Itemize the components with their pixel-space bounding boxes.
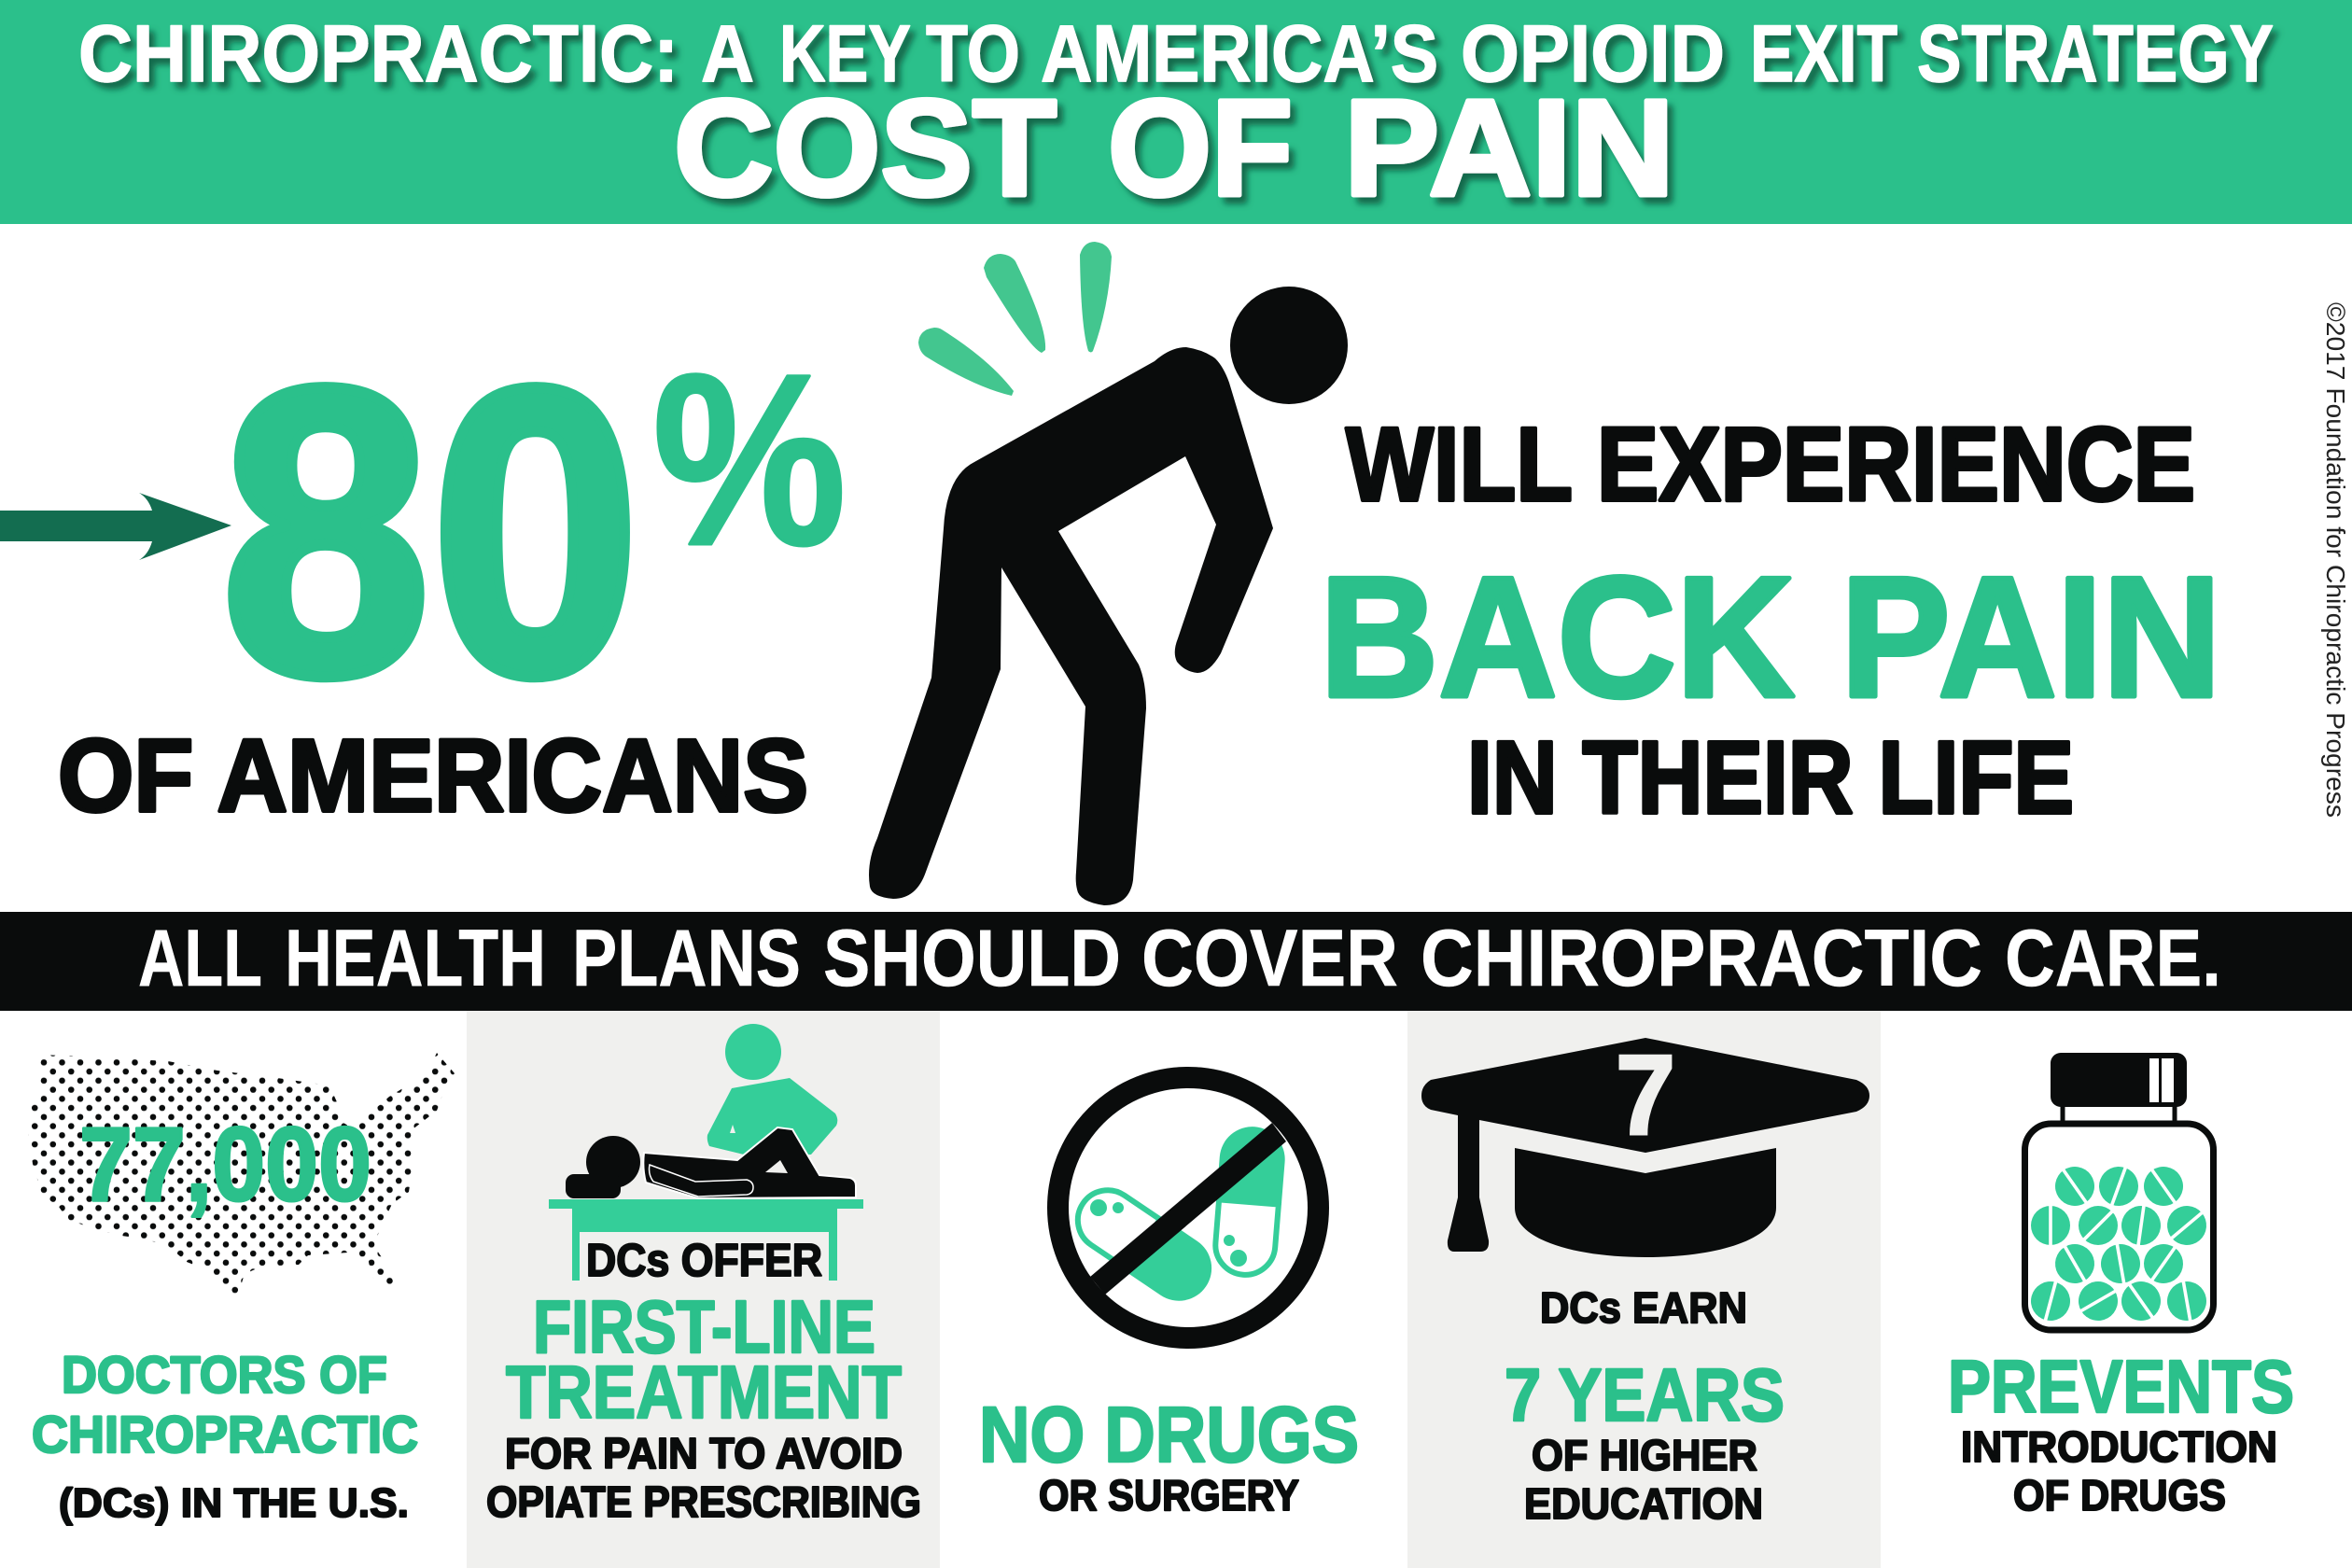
text: health plans statement: ALL: [138, 914, 262, 1003]
title: [78, 9, 2274, 99]
title: KEY: [779, 9, 911, 99]
text: will experience: WILL EXPERIENCE: [1346, 406, 2195, 523]
text: health plans statement: CHIROPRACTIC: [1421, 914, 1982, 1003]
heading: cost of pain: PAIN: [1344, 72, 1674, 225]
text: introduction: INTRODUCTION: [1961, 1422, 2277, 1471]
text: for pain to avoid: FOR PAIN TO AVOID: [505, 1429, 903, 1477]
copyright: ©2017 Foundation for Chiropractic Progress: [2321, 302, 2350, 818]
statistic: 77,000: 77,000: [79, 1106, 371, 1223]
heading: cost of pain: [674, 72, 1674, 225]
panel: prevents introduction of drugs: [1948, 1053, 2294, 1519]
text: health plans statement: CARE.: [2005, 914, 2221, 1003]
heading: cost of pain: OF: [1108, 72, 1293, 225]
text: DCs earn: DCs EARN: [1540, 1283, 1747, 1332]
statistic: 80 percent: 80: [221, 302, 640, 760]
text: first-line: FIRST-LINE: [533, 1285, 875, 1368]
text: health plans statement: SHOULD: [823, 914, 1121, 1003]
panel: first-line treatment: [467, 1011, 940, 1568]
text: in their life: IN THEIR LIFE: [1467, 721, 2074, 835]
text: health plans statement: PLANS: [572, 914, 801, 1003]
heading: cost of pain: COST: [674, 72, 1057, 225]
icon: person bent over with back pain: [869, 242, 1348, 905]
icon: prohibited pills: [1058, 1077, 1318, 1338]
text: education: EDUCATION: [1524, 1479, 1763, 1528]
title: CHIROPRACTIC:: [78, 9, 679, 99]
text: health plans statement: COVER: [1141, 914, 1398, 1003]
text: of drugs: OF DRUGS: [2013, 1471, 2226, 1519]
text: of Americans: OF AMERICANS: [58, 719, 808, 833]
icon: pill bottle: [2025, 1053, 2215, 1330]
text: no drugs: NO DRUGS: [979, 1391, 1359, 1478]
text: back pain: BACK PAIN: [1320, 540, 2221, 733]
text: or surgery: OR SURGERY: [1039, 1471, 1299, 1519]
panel: doctors of chiropractic: [28, 1053, 455, 1526]
panel: seven years of education: [1407, 1011, 1881, 1568]
text: prevents: PREVENTS: [1948, 1345, 2294, 1428]
text: chiropractic: CHIROPRACTIC: [32, 1405, 418, 1463]
text: health plans statement: HEALTH: [285, 914, 546, 1003]
title: OPIOID: [1461, 9, 1725, 99]
title: EXIT: [1750, 9, 1897, 99]
text: 7 years: 7 YEARS: [1505, 1353, 1785, 1436]
title: TO: [926, 9, 1020, 99]
text: 7 on cap: 7: [1616, 1031, 1675, 1158]
panel: black statement band: [0, 912, 2352, 1011]
icon: dotted US map: [28, 1053, 455, 1295]
text: DCs in the US: (DCs) IN THE U.S.: [59, 1480, 409, 1526]
icon: pain mark left: [918, 328, 1014, 396]
arrow: [0, 493, 231, 560]
title: AMERICA’S: [1041, 9, 1438, 99]
icon: chiropractor and patient on table: [549, 1024, 863, 1281]
text: doctors of: DOCTORS OF: [62, 1345, 387, 1404]
icon: graduation cap: [1421, 1031, 1869, 1257]
title: A: [701, 9, 754, 99]
text: opiate prescribing: OPIATE PRESCRIBING: [486, 1477, 921, 1526]
text: treatment: TREATMENT: [506, 1351, 902, 1434]
title: STRATEGY: [1917, 9, 2274, 99]
panel: header banner: [0, 0, 2352, 225]
panel: no drugs or surgery: [979, 1077, 1359, 1519]
pills: [2026, 1158, 2215, 1329]
text: health plans statement: [138, 914, 2221, 1003]
icon: pain mark right: [1080, 242, 1112, 353]
icon: pain mark middle: [984, 254, 1045, 353]
text: of higher: OF HIGHER: [1532, 1431, 1757, 1479]
text: DCs offer: DCs OFFER: [586, 1236, 822, 1286]
statistic: 80 percent: %: [652, 323, 847, 596]
